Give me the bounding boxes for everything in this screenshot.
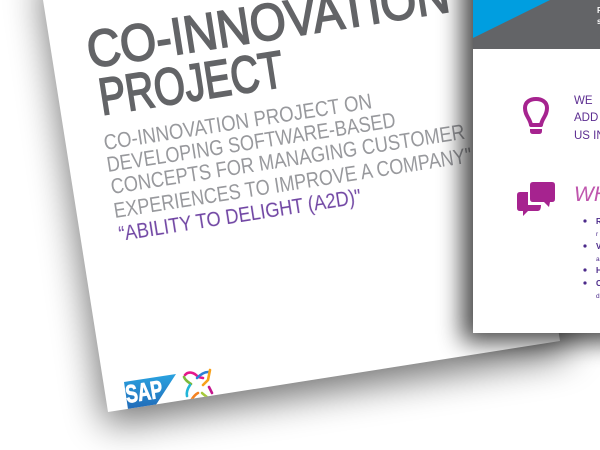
icon: light bulb	[525, 99, 547, 134]
panel: right page	[473, 0, 600, 333]
description text: DEVELOPING SOFTWARE-BASED	[105, 108, 397, 177]
bullet list: d	[596, 293, 600, 300]
description text	[102, 89, 473, 223]
panel shadow	[462, 0, 600, 342]
title	[83, 0, 453, 127]
icon: speech bubbles	[517, 182, 555, 216]
bullet list: r	[596, 231, 599, 238]
title: PROJECT	[95, 41, 288, 127]
panel: rotated project sheet	[43, 0, 560, 416]
description text: CONCEPTS FOR MANAGING CUSTOMER	[109, 120, 466, 199]
description text: CO-INNOVATION PROJECT ON	[102, 89, 374, 155]
icon: SAP logo: SAP	[124, 376, 164, 409]
header band	[473, 0, 600, 49]
icon: co-innovation logo	[184, 370, 212, 399]
highlighted phrase: “ABILITY TO DELIGHT (A2D)"	[117, 184, 363, 246]
intro text: WE	[574, 95, 593, 107]
intro text: ADD	[574, 112, 598, 124]
bullet list: a	[596, 256, 600, 263]
intro text	[574, 95, 600, 142]
description text: EXPERIENCES TO IMPROVE A COMPANY"	[112, 143, 473, 223]
bullet list	[583, 217, 600, 300]
